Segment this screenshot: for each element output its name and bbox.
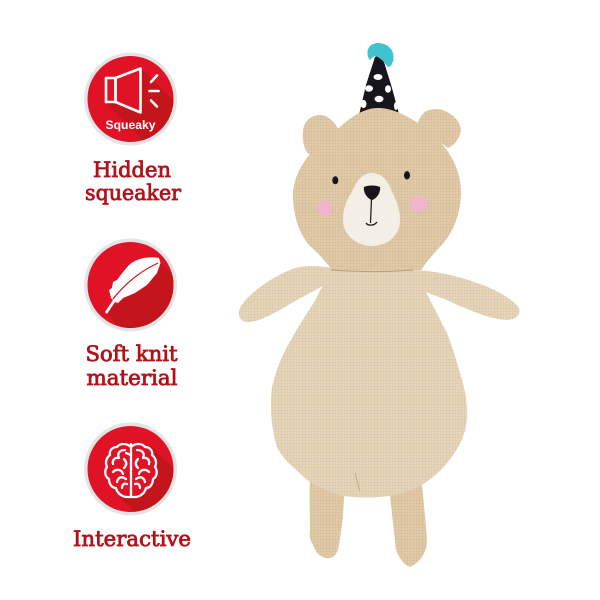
- long shadow of speaker: [106, 69, 174, 140]
- heading: hidden squeaker: [85, 158, 182, 205]
- icon: feather badge: [84, 238, 177, 332]
- heading: soft knit material: [86, 342, 178, 390]
- icon: feather: [105, 257, 160, 314]
- left ear: [303, 115, 340, 155]
- long shadow of brain: [115, 445, 174, 512]
- heading: soft knit material: material: [86, 366, 178, 390]
- belly seam: [355, 473, 360, 491]
- illustration: knit bear: [239, 43, 519, 567]
- icon: squeaker badge: [84, 52, 177, 146]
- left arm: [239, 266, 335, 322]
- heading: interactive: Interactive: [73, 527, 191, 551]
- right leg: [388, 475, 427, 567]
- heading: hidden squeaker: squeaker: [85, 181, 182, 205]
- head: [293, 108, 461, 270]
- badge label: Squeaky: [106, 120, 156, 132]
- pompom: [368, 43, 394, 67]
- heading: soft knit material: Soft knit: [86, 342, 178, 366]
- party hat: [359, 56, 399, 115]
- cheeks: [318, 196, 428, 217]
- right arm: [412, 270, 519, 320]
- neck seam: [331, 270, 413, 272]
- right ear: [417, 109, 461, 148]
- muzzle: [343, 173, 400, 246]
- left leg: [310, 475, 345, 558]
- icon: brain badge: [84, 422, 177, 516]
- eyes: [332, 171, 410, 184]
- nose and mouth: [364, 186, 380, 225]
- long shadow of feather: [105, 262, 174, 328]
- icon: speaker: [106, 68, 158, 112]
- body: [271, 270, 467, 498]
- icon: brain: [105, 444, 157, 497]
- heading: hidden squeaker: Hidden: [93, 158, 171, 182]
